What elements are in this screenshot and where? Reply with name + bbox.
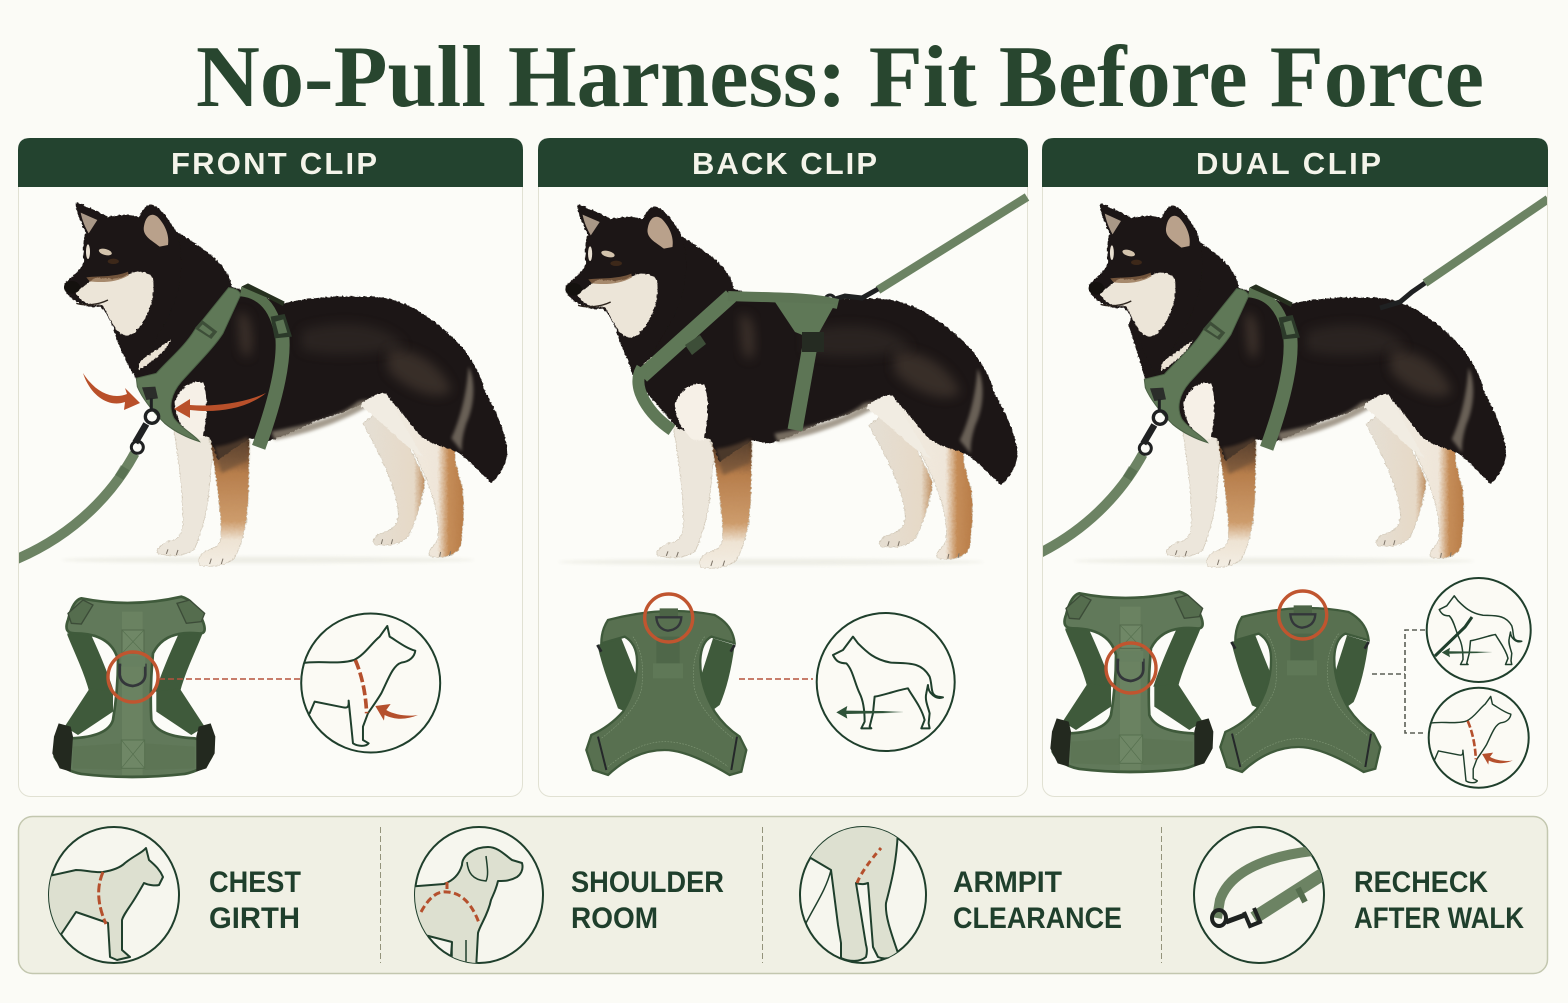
title: No-Pull Harness: Fit Before Force — [196, 29, 1484, 126]
label: armpit clearance: CLEARANCE — [953, 902, 1122, 935]
dog with back-clip harness — [558, 197, 1027, 568]
dog with front-clip harness — [15, 203, 507, 566]
icon: shoulder room — [405, 827, 543, 970]
icon: chest steering dog — [301, 614, 440, 752]
panel: fit checklist band — [18, 816, 1548, 974]
label: recheck after walk: AFTER WALK — [1354, 902, 1524, 935]
label: recheck after walk: RECHECK — [1354, 866, 1488, 899]
header: front clip — [18, 138, 523, 187]
icon: armpit clearance — [800, 820, 926, 963]
icon: chest girth — [40, 827, 179, 963]
back harness product view — [1220, 591, 1380, 772]
header: dual clip — [1042, 138, 1548, 187]
icon: dual chest dog — [1429, 688, 1529, 788]
leash — [825, 197, 1027, 305]
header: dual clip: DUAL CLIP — [1196, 146, 1381, 181]
connector line — [159, 678, 300, 680]
connector line — [739, 678, 813, 680]
label: shoulder room — [571, 866, 724, 935]
header: front clip: FRONT CLIP — [171, 146, 377, 181]
label: armpit clearance: ARMPIT — [953, 866, 1062, 899]
back-clip harness — [638, 296, 838, 430]
icon: dual back clip dog — [1427, 578, 1531, 682]
front harness product view — [52, 597, 215, 777]
label: recheck after walk — [1354, 866, 1524, 935]
panel: front clip — [15, 138, 523, 796]
panel: dual clip — [1023, 138, 1548, 796]
label: shoulder room: ROOM — [571, 902, 658, 935]
label: shoulder room: SHOULDER — [571, 866, 724, 899]
header: back clip: BACK CLIP — [692, 146, 877, 181]
connector bracket — [1372, 630, 1425, 733]
icon: back clip dog — [817, 613, 955, 751]
front harness product view — [1050, 592, 1213, 772]
back leash — [1380, 199, 1548, 308]
arrows: pull redirection — [83, 373, 266, 418]
label: chest girth — [209, 866, 301, 935]
header: back clip — [538, 138, 1028, 187]
label: chest girth: GIRTH — [209, 902, 300, 935]
panel: back clip — [538, 138, 1028, 796]
dog with dual-clip harness — [1023, 199, 1548, 567]
label: chest girth: CHEST — [209, 866, 301, 899]
icon: recheck leash — [1194, 827, 1326, 963]
label: armpit clearance — [953, 866, 1122, 935]
back harness product view — [586, 594, 746, 775]
